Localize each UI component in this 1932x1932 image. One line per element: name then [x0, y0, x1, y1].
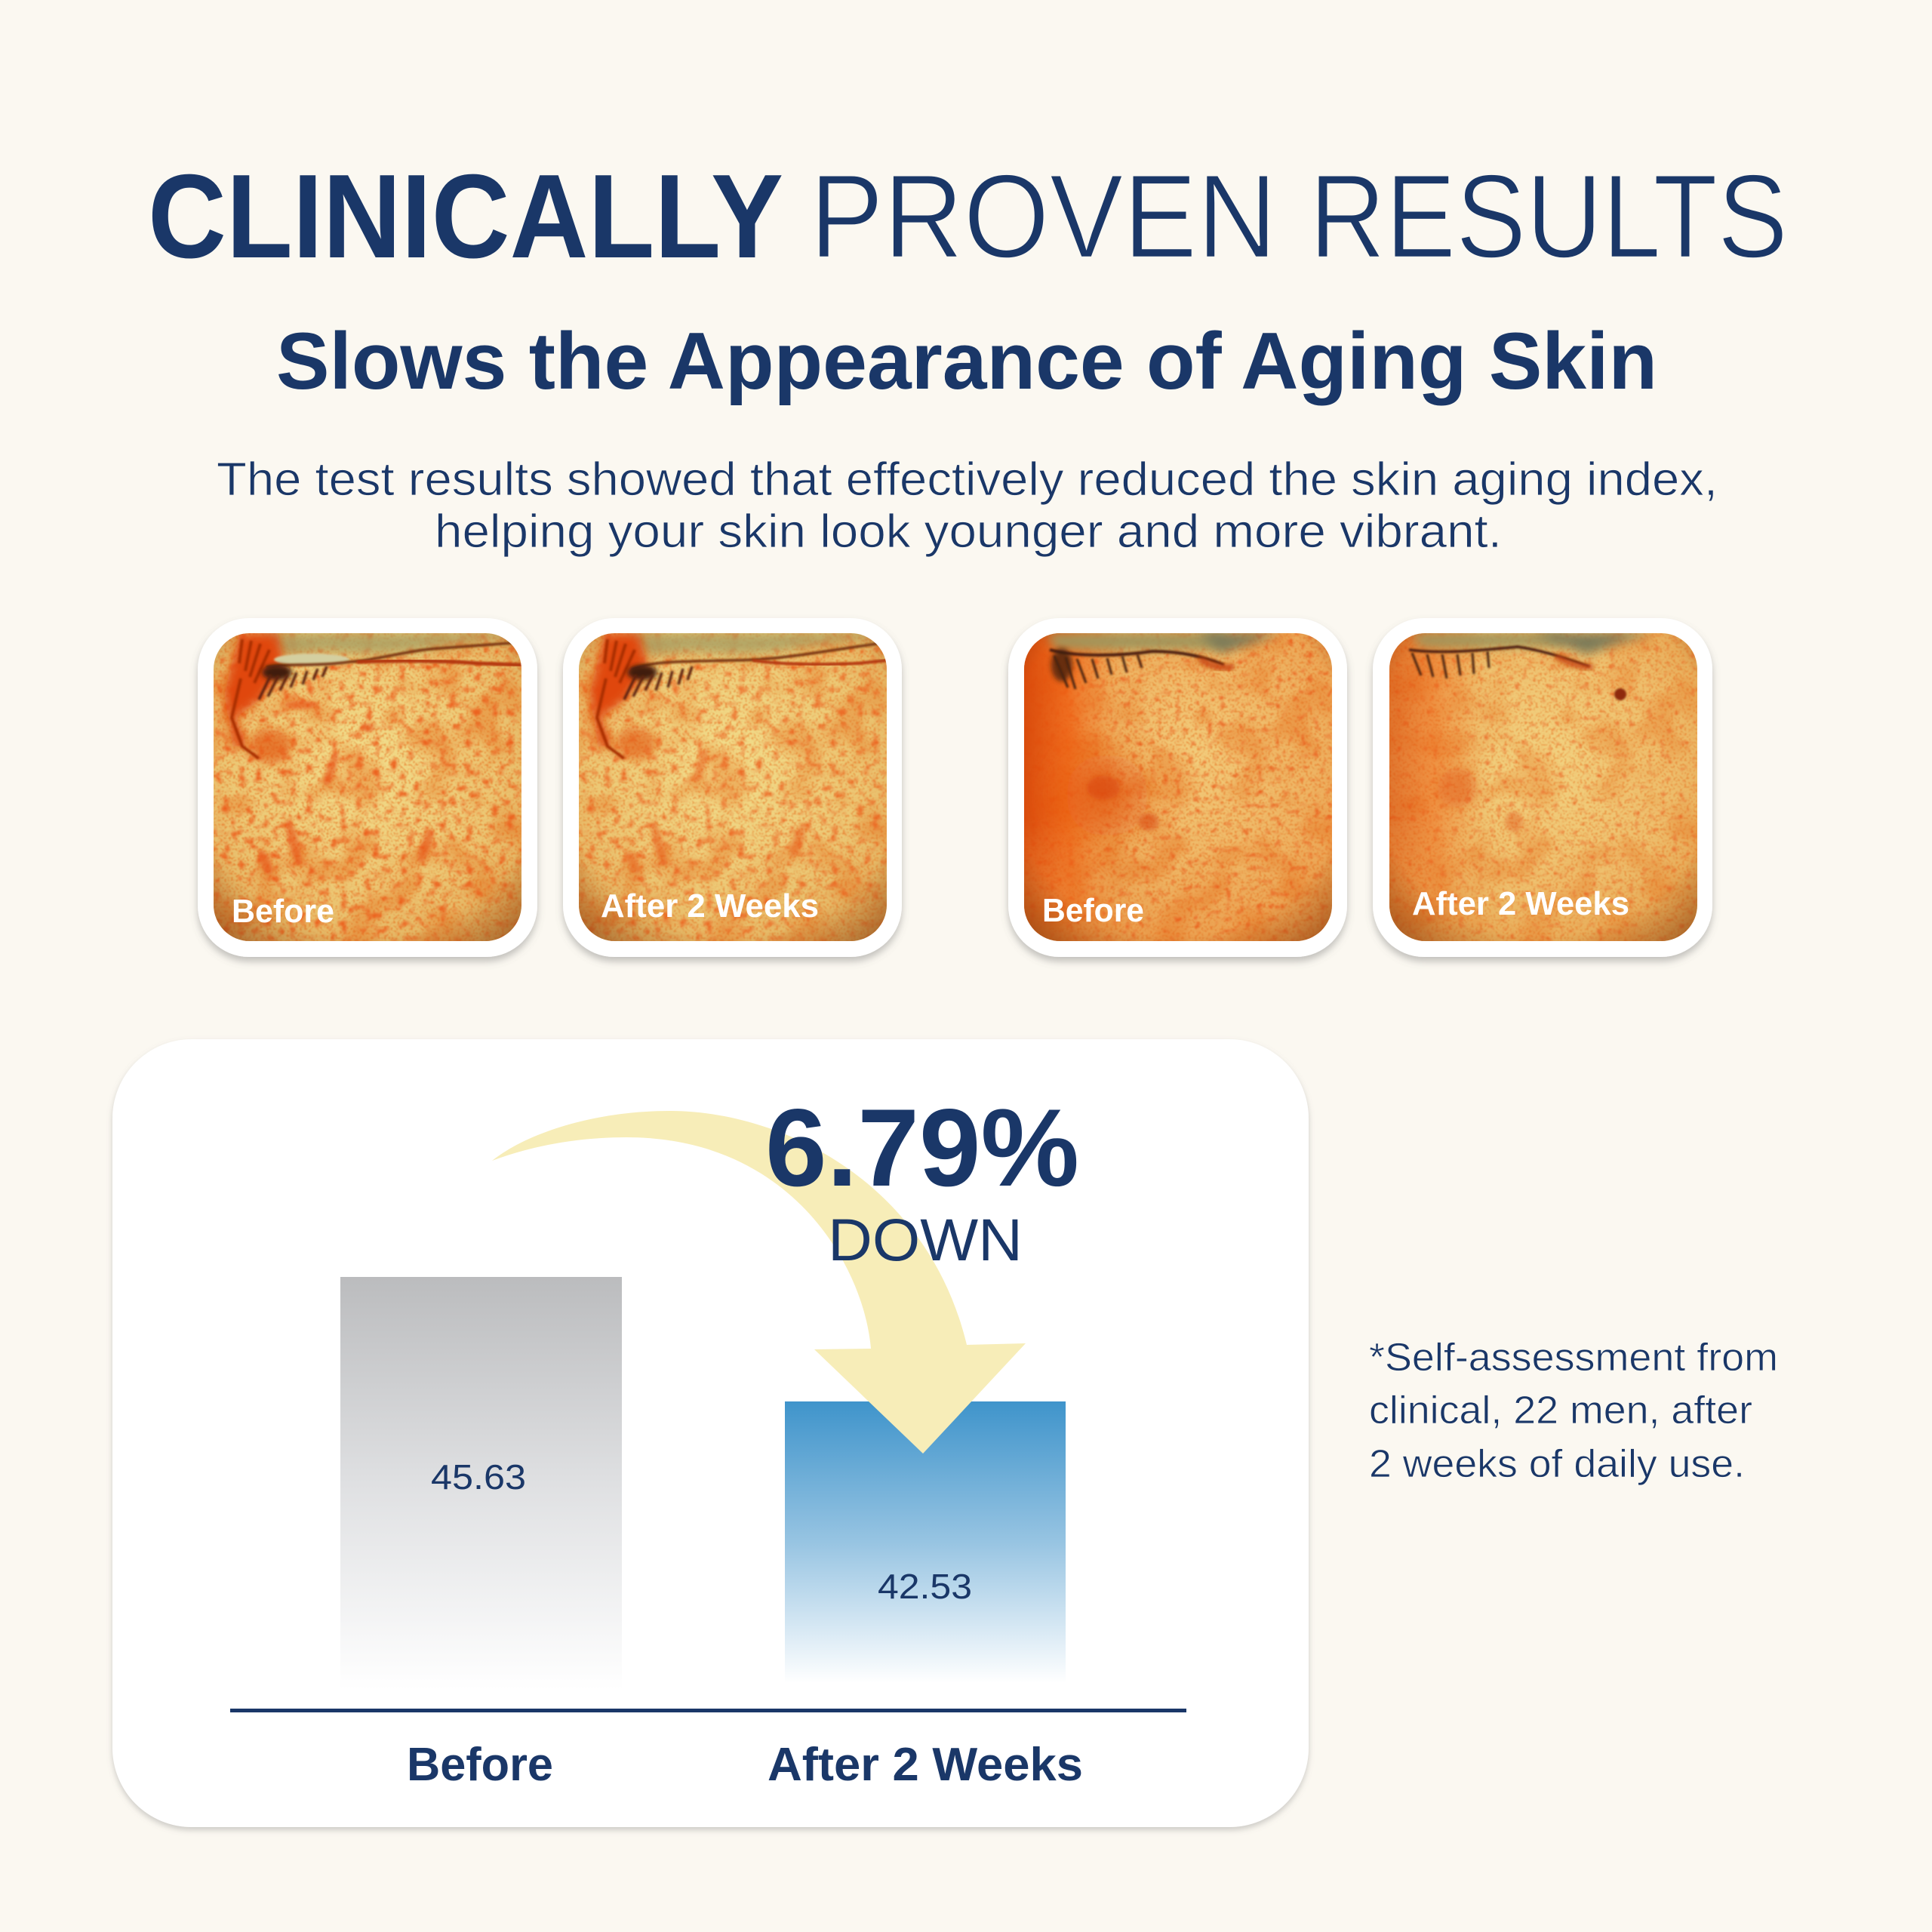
panel: photo pair two after — [1373, 618, 1712, 957]
photo: skin after 2 weeks — [579, 633, 887, 941]
panel: chart card — [112, 1039, 1309, 1827]
panel: photo pair one after — [563, 618, 902, 957]
intro text: helping your skin look younger and more vibrant. — [435, 506, 1502, 558]
footnote — [1369, 1336, 1778, 1486]
photo: skin after 2 weeks — [1389, 633, 1697, 941]
footnote: clinical, 22 men, after — [1369, 1389, 1752, 1432]
label: after 2 weeks: After 2 Weeks — [1412, 885, 1629, 922]
photo: skin before — [1024, 633, 1332, 941]
axis label: after 2 weeks: After 2 Weeks — [768, 1739, 1083, 1791]
callout: percent decrease: DOWN — [828, 1206, 1023, 1273]
intro text — [217, 454, 1718, 558]
label: after 2 weeks: After 2 Weeks — [601, 888, 819, 924]
callout: percent decrease: 6.79% — [765, 1086, 1079, 1209]
chart baseline — [230, 1709, 1186, 1712]
footnote: 2 weeks of daily use. — [1369, 1442, 1745, 1486]
title: CLINICALLY — [148, 150, 783, 283]
bar: before value — [340, 1277, 622, 1690]
panel: photo pair two before — [1008, 618, 1347, 957]
bar: after value: 42.53 — [878, 1567, 972, 1606]
axis label: before: Before — [407, 1739, 553, 1791]
title: PROVEN — [810, 150, 1277, 283]
footnote: *Self-assessment from — [1369, 1336, 1778, 1380]
title — [148, 150, 1788, 283]
label: before: Before — [1042, 892, 1144, 929]
subtitle: Slows the Appearance of Aging Skin — [276, 315, 1657, 406]
callout: percent decrease — [765, 1086, 1079, 1273]
photo: skin before — [214, 633, 521, 941]
panel: photo pair one before — [198, 618, 537, 957]
bar: before value: 45.63 — [431, 1457, 526, 1497]
bar: after value — [785, 1401, 1066, 1683]
intro text: The test results showed that effectively reduced the skin aging index, — [217, 454, 1718, 506]
label: before: Before — [232, 893, 334, 930]
arrow: curved down arrow — [492, 1111, 1026, 1454]
title: RESULTS — [1309, 150, 1788, 283]
